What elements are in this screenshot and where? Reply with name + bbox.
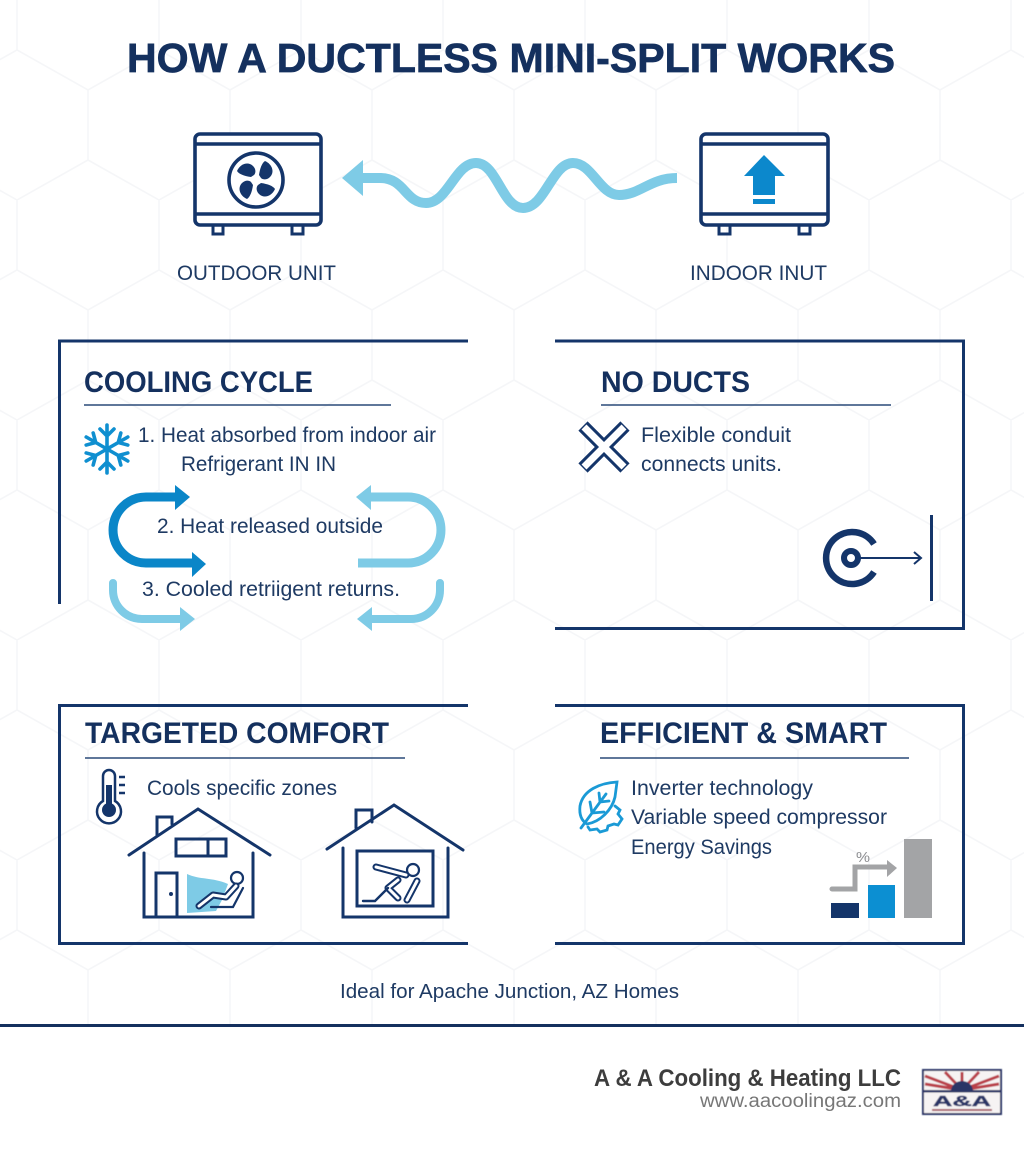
icon: leaf and gear xyxy=(580,782,622,832)
efficiency text: Inverter technology xyxy=(631,777,814,800)
arrow: lower right xyxy=(357,583,440,631)
step 1 text: 1. Heat absorbed from indoor air xyxy=(138,424,436,447)
no ducts text: connects units. xyxy=(641,453,782,476)
icon: outdoor unit xyxy=(195,134,321,234)
panel: targeted comfort xyxy=(60,706,468,944)
panel: no ducts xyxy=(555,341,964,628)
heading: targeted comfort: TARGETED COMFORT xyxy=(85,717,389,750)
refrigerant text: Refrigerant IN IN xyxy=(181,453,336,476)
icon: thermometer xyxy=(97,770,125,823)
panel: efficient and smart xyxy=(555,706,964,944)
arrow: light loop xyxy=(356,485,441,563)
website: www.aacoolingaz.com xyxy=(699,1091,901,1112)
arrow: lower left xyxy=(113,583,195,631)
logo: A&A xyxy=(933,1093,991,1110)
icon: house with person xyxy=(327,805,463,917)
heading: cooling cycle: COOLING CYCLE xyxy=(84,366,313,399)
chart: energy savings bars xyxy=(831,839,932,918)
label: indoor unit: INDOOR INUT xyxy=(690,262,827,285)
title: HOW A DUCTLESS MINI-SPLIT WORKS xyxy=(127,35,895,81)
zones text: Cools specific zones xyxy=(147,777,337,800)
arrow: refrigerant line xyxy=(342,160,677,208)
heading: efficient and smart: EFFICIENT & SMART xyxy=(600,717,887,750)
chart: energy savings bars: % xyxy=(856,849,870,866)
icon: indoor unit xyxy=(701,134,828,234)
caption: Ideal for Apache Junction, AZ Homes xyxy=(340,981,679,1003)
efficiency text xyxy=(631,777,887,859)
company name: A & A Cooling & Heating LLC xyxy=(594,1065,901,1092)
step 3 text: 3. Cooled retriigent returns. xyxy=(142,578,400,601)
icon: house with cooled zone xyxy=(129,809,270,917)
icon: snowflake xyxy=(83,425,131,473)
no ducts text xyxy=(641,424,791,476)
footer band xyxy=(0,1024,1024,1154)
arrow: dark loop xyxy=(113,485,206,577)
efficiency text: Energy Savings xyxy=(631,836,772,859)
no ducts text: Flexible conduit xyxy=(641,424,791,447)
icon: crossed ducts xyxy=(583,426,625,468)
efficiency text: Variable speed compressor xyxy=(631,806,887,829)
heading: no ducts: NO DUCTS xyxy=(601,366,750,399)
logo xyxy=(923,1070,1001,1114)
panel: cooling cycle xyxy=(60,341,468,631)
icon: conduit target xyxy=(826,515,932,601)
step 2 text: 2. Heat released outside xyxy=(157,515,383,538)
label: outdoor unit: OUTDOOR UNIT xyxy=(177,262,336,285)
